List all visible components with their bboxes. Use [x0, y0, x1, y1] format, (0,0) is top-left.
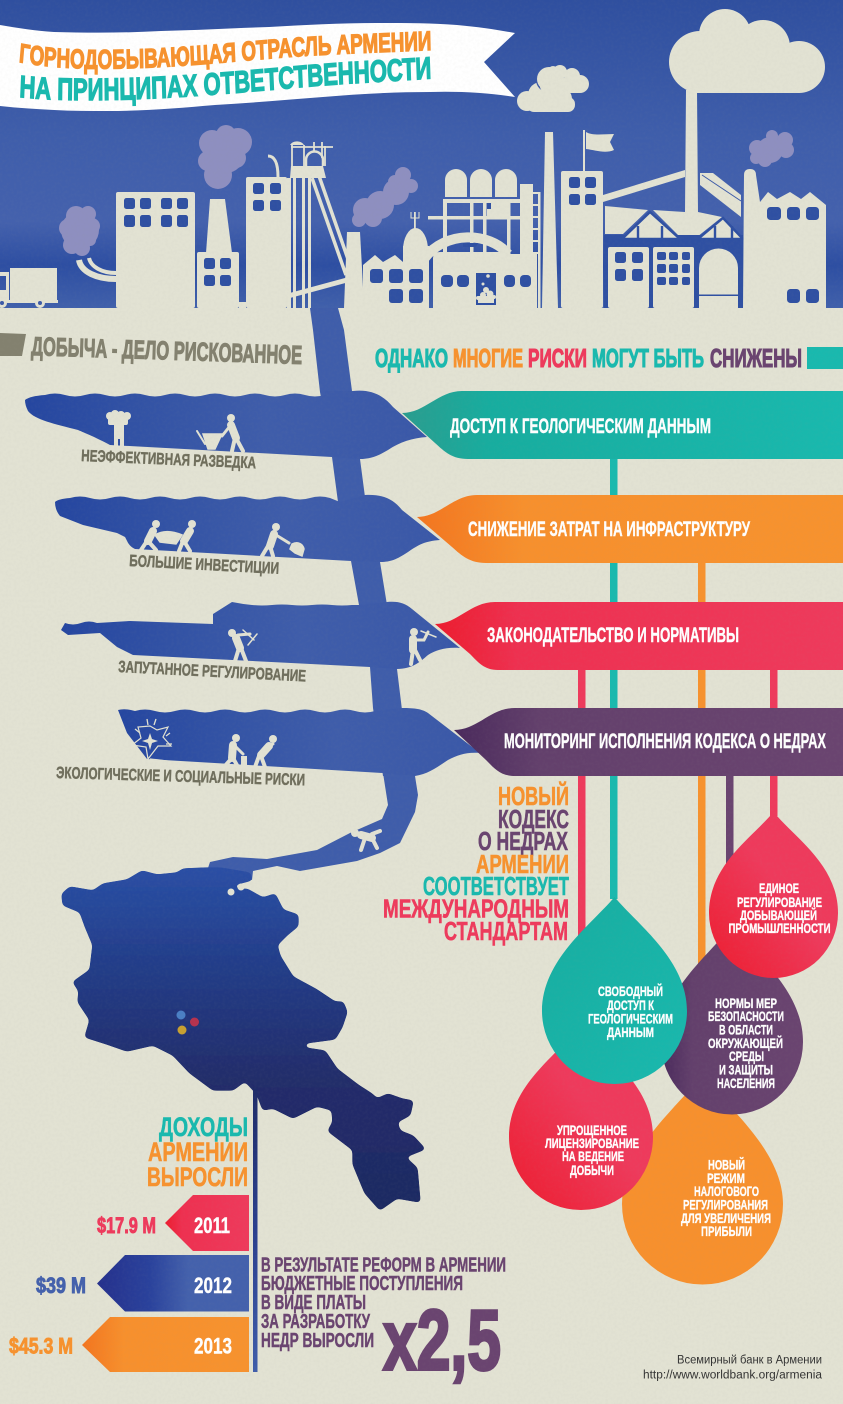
banner: monitoring	[454, 708, 843, 776]
timeline bar	[253, 1087, 258, 1372]
arch building	[424, 237, 537, 308]
building E with flag	[561, 130, 614, 308]
title line 1: ГОРНОДОБЫВАЮЩАЯ ОТРАСЛЬ АРМЕНИИ	[19, 30, 431, 75]
icon: geologist with plants	[106, 410, 131, 448]
big multiplier: x2,5	[383, 1294, 501, 1388]
droplet: simplified licensing: НА ВЕДЕНИЕ	[562, 1149, 624, 1164]
truss roofs	[622, 212, 743, 239]
revenue heading	[147, 1112, 248, 1192]
new code statement	[383, 781, 569, 946]
icon: worker with wheelbarrow	[197, 414, 243, 451]
pipes	[79, 258, 116, 279]
droplet: new tax regime: ДЛЯ УВЕЛИЧЕНИЯ	[681, 1211, 771, 1226]
droplet: free access to data: ДАННЫМ	[607, 1025, 654, 1040]
right building and chimney	[743, 169, 826, 308]
tower with ladder	[520, 184, 540, 308]
smoke clouds	[59, 125, 794, 256]
subtitle: risks can be reduced	[375, 343, 843, 373]
droplet: free access to data	[542, 897, 687, 1084]
droplet: simplified licensing	[509, 1025, 653, 1210]
reform text	[261, 1254, 506, 1352]
reform text: В РЕЗУЛЬТАТЕ РЕФОРМ В АРМЕНИИ	[261, 1254, 506, 1276]
chamber 3: confusing regulation	[61, 602, 460, 686]
droplet: free access to data: ГЕОЛОГИЧЕСКИМ	[588, 1012, 673, 1026]
droplet: new tax regime: ПРИБЫЛИ	[701, 1224, 752, 1239]
factory skyline left	[79, 141, 364, 308]
banner: legislation	[435, 602, 843, 670]
chamber 4: environmental and social risk	[56, 708, 480, 789]
tall chimney	[542, 132, 558, 308]
building A	[116, 192, 195, 308]
mine head frame	[287, 141, 349, 308]
revenue arrow 2011: 2011	[194, 1213, 230, 1238]
subtitle: risks can be reduced: МНОГИЕ	[453, 343, 523, 373]
droplet: safety norms: СРЕДЫ	[729, 1049, 764, 1064]
reform text: ЗА РАЗРАБОТКУ	[261, 1310, 370, 1333]
droplet: safety norms: В ОБЛАСТИ	[719, 1022, 773, 1037]
icon: gems	[176, 1010, 199, 1034]
lower buildings	[608, 247, 738, 308]
chamber 1: inefficient exploration	[25, 391, 427, 472]
new code statement: О НЕДРАХ	[478, 826, 568, 856]
icon: crawling miner	[351, 829, 380, 850]
droplet: simplified licensing: ДОБЫЧИ	[570, 1163, 614, 1178]
revenue arrow 2012: 2012	[194, 1273, 232, 1298]
new code statement: СТАНДАРТАМ	[444, 916, 568, 946]
revenue arrow 2013	[9, 1317, 249, 1372]
droplet: new tax regime: НАЛОГОВОГО	[694, 1184, 759, 1199]
reform text: БЮДЖЕТНЫЕ ПОСТУПЛЕНИЯ	[261, 1272, 463, 1295]
building C	[246, 156, 287, 308]
droplet: new tax regime: РЕЖИМ	[707, 1171, 745, 1186]
revenue arrow 2011	[97, 1195, 249, 1251]
banner: geological data	[402, 391, 843, 459]
banner: infrastructure costs	[417, 495, 843, 563]
label: ЗАПУТАННОЕ РЕГУЛИРОВАНИЕ	[118, 658, 306, 686]
revenue arrow 2013: $45.3 М	[9, 1334, 73, 1358]
droplet: simplified licensing: УПРОЩЕННОЕ	[557, 1123, 627, 1138]
source credit	[643, 1354, 823, 1382]
subtitle: risks can be reduced: МОГУТ БЫТЬ	[592, 343, 704, 373]
icon: miner at right	[410, 628, 436, 664]
connector lines	[578, 459, 778, 968]
small cloud	[517, 65, 589, 112]
droplet: unified regulation	[709, 812, 838, 978]
droplet: new tax regime	[622, 1075, 783, 1284]
revenue arrow 2013: 2013	[194, 1334, 232, 1358]
new code statement: МЕЖДУНАРОДНЫМ	[383, 894, 569, 924]
subtitle: risks can be reduced: ОДНАКО	[375, 343, 448, 373]
factory skyline right	[604, 169, 826, 308]
droplet: free access to data: ДОСТУП К	[607, 998, 655, 1013]
silos	[445, 169, 517, 197]
big cloud and stack	[653, 9, 825, 237]
revenue heading: ВЫРОСЛИ	[147, 1162, 248, 1192]
icon: explosion	[132, 719, 225, 766]
reform text: НЕДР ВЫРОСЛИ	[261, 1329, 374, 1352]
lower tunnel	[208, 773, 418, 880]
revenue arrow 2011: $17.9 М	[97, 1213, 156, 1238]
label: ЭКОЛОГИЧЕСКИЕ И СОЦИАЛЬНЫЕ РИСКИ	[56, 764, 305, 789]
chamber 2: large investment	[55, 495, 440, 578]
mine shaft	[310, 308, 415, 776]
droplet: free access to data: СВОБОДНЫЙ	[598, 984, 663, 999]
reform text: В ВИДЕ ПЛАТЫ	[261, 1291, 366, 1314]
sawtooth house with dome	[363, 212, 429, 308]
building D	[344, 232, 364, 308]
factory skyline centre	[363, 130, 741, 308]
new code statement: СООТВЕТСТВУЕТ	[423, 871, 569, 901]
chimney and building B	[197, 199, 239, 308]
title banner	[0, 23, 515, 111]
new code statement: КОДЕКС	[498, 804, 569, 834]
map of Armenia	[62, 868, 425, 1210]
sky	[0, 0, 843, 308]
new code statement: НОВЫЙ	[498, 781, 569, 811]
icon: worker pushing load	[262, 523, 304, 556]
subtitle: mining is risky	[0, 331, 303, 370]
droplet: safety norms: НАСЕЛЕНИЯ	[717, 1076, 775, 1091]
banner: geological data: ДОСТУП К ГЕОЛОГИЧЕСКИМ ДАННЫМ	[450, 415, 711, 438]
scaffold	[428, 199, 523, 259]
revenue heading: АРМЕНИИ	[148, 1137, 248, 1167]
new code statement: АРМЕНИИ	[476, 849, 569, 879]
revenue arrow 2012	[36, 1255, 249, 1312]
droplet: simplified licensing: ЛИЦЕНЗИРОВАНИЕ	[545, 1136, 639, 1151]
droplet: new tax regime: РЕГУЛИРОВАНИЯ	[683, 1198, 768, 1212]
subtitle: risks can be reduced: РИСКИ	[528, 343, 587, 373]
truck	[0, 268, 58, 308]
icon: workers with detonator	[224, 734, 277, 767]
droplet: safety norms: НОРМЫ МЕР	[715, 996, 777, 1011]
icon: miner with pick	[228, 629, 257, 661]
revenue arrow 2012: $39 М	[36, 1273, 86, 1298]
source credit: http://www.worldbank.org/armenia	[643, 1370, 823, 1382]
label: НЕЭФФЕКТИВНАЯ РАЗВЕДКА	[81, 447, 256, 472]
subtitle: mining is risky: ДОБЫЧА - ДЕЛО РИСКОВАННОЕ	[31, 331, 303, 370]
droplet: unified regulation: ЕДИНОЕ	[759, 881, 799, 896]
title line 2: НА ПРИНЦИПАХ ОТВЕТСТВЕННОСТИ	[20, 56, 431, 106]
conveyors	[603, 170, 741, 234]
icon: two workers carrying	[141, 520, 196, 551]
source credit: Всемирный банк в Армении	[677, 1354, 822, 1366]
label: БОЛЬШИЕ ИНВЕСТИЦИИ	[129, 552, 280, 578]
droplet: safety norms	[661, 925, 803, 1114]
droplet: new tax regime: НОВЫЙ	[708, 1158, 745, 1172]
droplet: safety norms: ОКРУЖАЮЩЕЙ	[708, 1036, 783, 1051]
droplet: safety norms: И ЗАЩИТЫ	[719, 1062, 773, 1078]
revenue heading: ДОХОДЫ	[159, 1112, 248, 1142]
droplet: safety norms: БЕЗОПАСНОСТИ	[708, 1009, 784, 1024]
